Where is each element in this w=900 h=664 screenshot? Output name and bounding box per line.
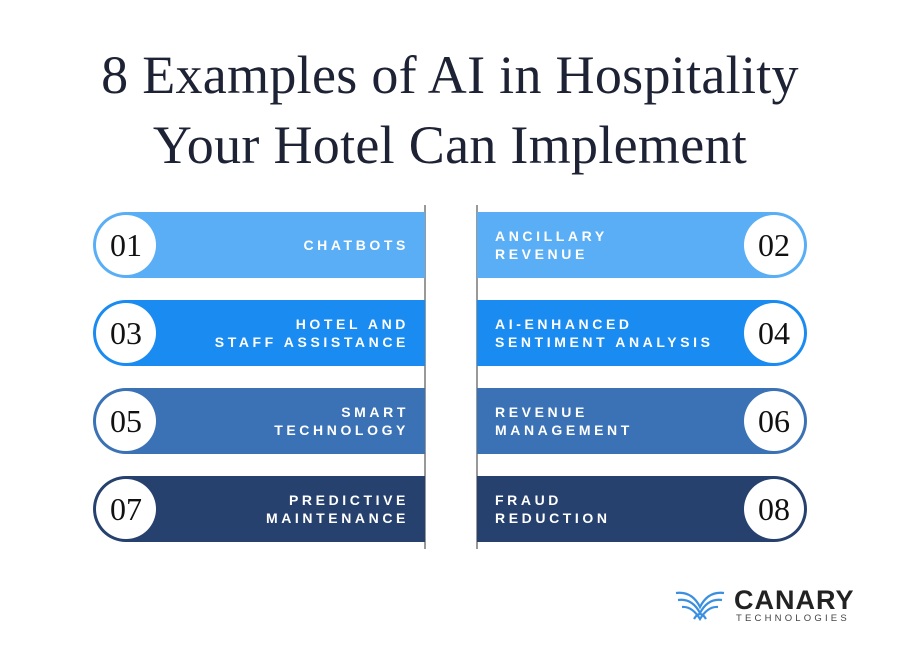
item 07: [93, 476, 425, 542]
title: [101, 45, 799, 175]
item 05: SMART: [341, 404, 409, 420]
item 04: 04: [758, 315, 790, 351]
logo: TECHNOLOGIES: [736, 613, 850, 624]
item 08: [477, 476, 807, 542]
item 02: REVENUE: [495, 246, 588, 262]
item 08: FRAUD: [495, 492, 562, 508]
item 06: REVENUE: [495, 404, 588, 420]
item 03: 03: [110, 315, 142, 351]
item 03: HOTEL AND: [296, 316, 409, 332]
item 04: [477, 300, 807, 366]
title: Your Hotel Can Implement: [153, 115, 747, 175]
title: 8 Examples of AI in Hospitality: [101, 45, 799, 105]
item 02: ANCILLARY: [495, 228, 608, 244]
item 06: [477, 388, 807, 454]
item 05: [93, 388, 425, 454]
item 06: MANAGEMENT: [495, 422, 633, 438]
item 08: 08: [758, 491, 790, 527]
item 07: PREDICTIVE: [289, 492, 409, 508]
item 04: AI-ENHANCED: [495, 316, 633, 332]
item 03: STAFF ASSISTANCE: [215, 334, 409, 350]
item 02: 02: [758, 227, 790, 263]
item 07: MAINTENANCE: [266, 510, 409, 526]
item 01: CHATBOTS: [303, 237, 409, 253]
item 08: REDUCTION: [495, 510, 611, 526]
logo: [676, 585, 854, 624]
item 01: 01: [110, 227, 142, 263]
item 01: [93, 212, 425, 278]
item 05: TECHNOLOGY: [274, 422, 409, 438]
item 06: 06: [758, 403, 790, 439]
item 04: SENTIMENT ANALYSIS: [495, 334, 714, 350]
item 07: 07: [110, 491, 142, 527]
item 02: [477, 212, 807, 278]
item 05: 05: [110, 403, 142, 439]
logo: CANARY: [734, 585, 854, 615]
icon: canary wings: [676, 592, 724, 621]
item 03: [93, 300, 425, 366]
